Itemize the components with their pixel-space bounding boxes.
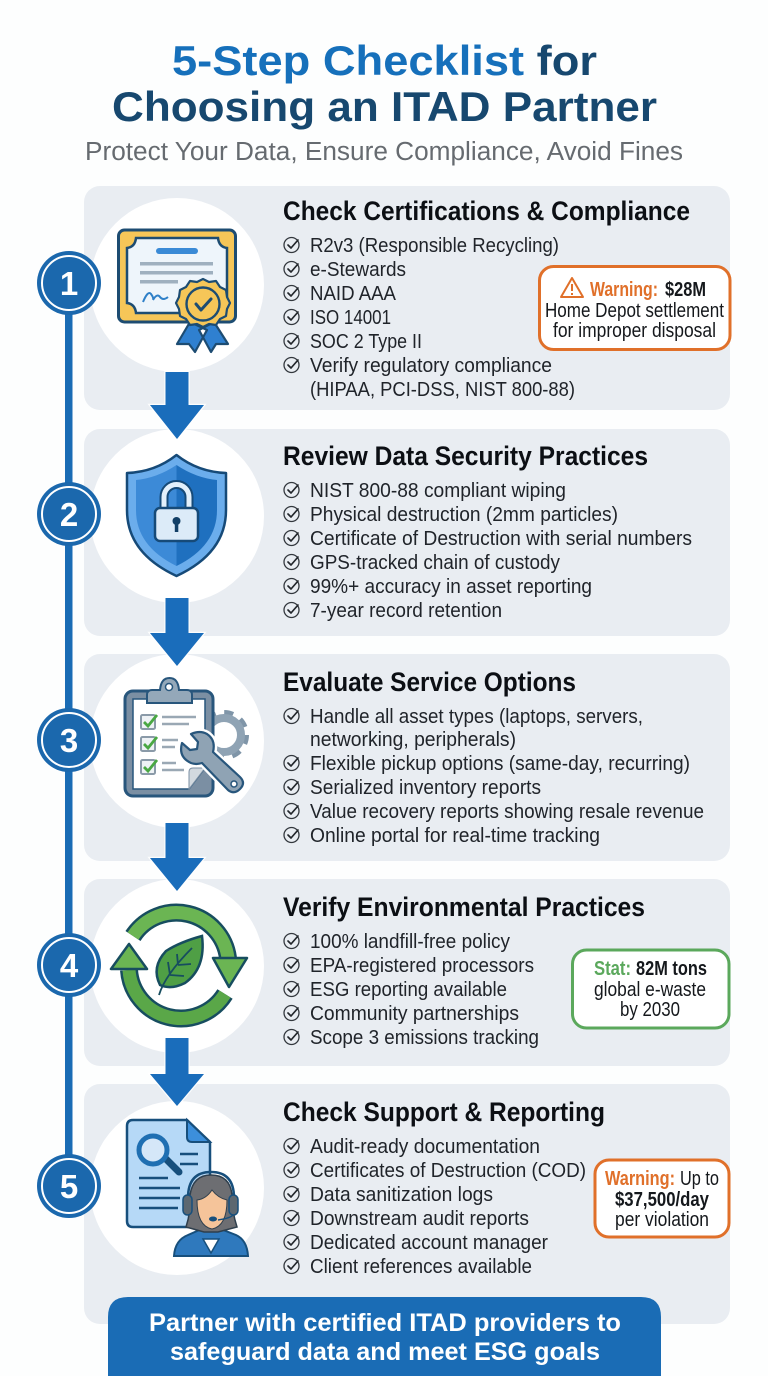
step 5 checklist xyxy=(284,1136,586,1278)
step 4 checklist: Community partnerships xyxy=(310,1003,519,1025)
step 3 heading: Evaluate Service Options xyxy=(283,667,576,697)
step 5 checklist: Client references available xyxy=(310,1256,532,1278)
step 4 heading: Verify Environmental Practices xyxy=(283,892,645,922)
step 3 checklist: Value recovery reports showing resale revenue xyxy=(310,801,704,823)
step 2 checklist: GPS-tracked chain of custody xyxy=(310,552,560,574)
arrow: step 4 to 5 xyxy=(150,1038,204,1106)
callout: e-waste stat: 82M tons xyxy=(636,958,707,980)
step number 5 xyxy=(37,1154,101,1218)
callout: e-waste stat: global e-waste xyxy=(594,979,706,1001)
panel: step 2 background xyxy=(84,429,730,636)
step 2 checklist: Physical destruction (2mm particles) xyxy=(310,504,618,526)
step 5 heading: Check Support & Reporting xyxy=(283,1097,605,1127)
icon: certificate with rosette xyxy=(118,230,236,352)
step 1 checklist xyxy=(284,235,575,401)
icon disc: step 4 xyxy=(90,879,264,1053)
step 2 checklist: NIST 800-88 compliant wiping xyxy=(310,480,566,502)
step number 4 xyxy=(37,933,101,997)
step 4 checklist: ESG reporting available xyxy=(310,979,507,1001)
callout: per-violation warning xyxy=(595,1160,729,1237)
title: 5-Step Checklist for xyxy=(172,37,597,84)
icon: document review with support agent xyxy=(127,1120,248,1256)
callout: Home Depot warning: for improper disposal xyxy=(553,320,716,342)
step 1 checklist: NAID AAA xyxy=(310,283,397,305)
callout: e-waste stat: Stat: xyxy=(594,958,631,980)
call to action banner: Partner with certified ITAD providers to xyxy=(149,1309,621,1337)
step number 4: 4 xyxy=(60,947,79,984)
callout: e-waste stat xyxy=(572,950,729,1028)
step 5 checklist: Downstream audit reports xyxy=(310,1208,529,1230)
step number 5: 5 xyxy=(60,1168,78,1205)
step 2 checklist: Certificate of Destruction with serial numbers xyxy=(310,528,692,550)
title xyxy=(112,37,657,130)
step 1 checklist: (HIPAA, PCI-DSS, NIST 800-88) xyxy=(310,379,575,401)
step 1 checklist: e-Stewards xyxy=(310,259,406,281)
arrow: step 2 to 3 xyxy=(150,598,204,666)
step 4 checklist xyxy=(284,931,539,1049)
panel: step 4 background xyxy=(84,879,730,1066)
panel: step 5 background xyxy=(84,1084,730,1324)
icon: clipboard with gear and wrench xyxy=(125,678,245,796)
step 1 checklist: Verify regulatory compliance xyxy=(310,355,552,377)
icon disc: step 2 xyxy=(90,429,264,603)
step 1 heading: Check Certifications & Compliance xyxy=(283,196,690,226)
step 5 checklist: Data sanitization logs xyxy=(310,1184,493,1206)
step 3 checklist: networking, peripherals) xyxy=(310,729,516,751)
step 4 checklist: EPA-registered processors xyxy=(310,955,534,977)
step 1 checklist: R2v3 (Responsible Recycling) xyxy=(310,235,559,257)
title: Choosing an ITAD Partner xyxy=(112,83,657,130)
icon disc: step 1 xyxy=(90,198,264,372)
arrow: step 1 to 2 xyxy=(150,372,204,439)
step 4 checklist: 100% landfill-free policy xyxy=(310,931,510,953)
timeline line xyxy=(65,283,72,1186)
step 3 checklist xyxy=(284,706,704,847)
callout: per-violation warning: $37,500/day xyxy=(615,1189,710,1211)
panel: step 3 background xyxy=(84,654,730,861)
step number 3 xyxy=(37,708,101,772)
step 2 heading: Review Data Security Practices xyxy=(283,441,648,471)
step number 2: 2 xyxy=(60,496,78,533)
icon disc: step 3 xyxy=(90,654,264,828)
panel: step 1 background xyxy=(84,186,730,410)
step 2 checklist: 99%+ accuracy in asset reporting xyxy=(310,576,592,598)
step 1 checklist: ISO 14001 xyxy=(310,307,391,329)
subtitle: Protect Your Data, Ensure Compliance, Avoid Fines xyxy=(85,138,683,166)
icon: recycling arrows with leaf xyxy=(111,913,247,1018)
icon: security shield with padlock xyxy=(127,455,226,576)
step 3 checklist: Serialized inventory reports xyxy=(310,777,541,799)
step 5 checklist: Dedicated account manager xyxy=(310,1232,548,1254)
callout: Home Depot warning: Home Depot settlement xyxy=(545,300,724,322)
step number 2 xyxy=(37,482,101,546)
step 2 checklist xyxy=(284,480,692,622)
icon disc: step 5 xyxy=(90,1101,264,1275)
step 5 checklist: Certificates of Destruction (COD) xyxy=(310,1160,586,1182)
call to action banner xyxy=(108,1297,661,1376)
callout: e-waste stat: by 2030 xyxy=(620,999,680,1021)
callout: per-violation warning: Warning: xyxy=(605,1168,675,1190)
step 3 checklist: Handle all asset types (laptops, servers, xyxy=(310,706,643,728)
step number 1: 1 xyxy=(60,265,78,302)
callout: Home Depot warning: $28M xyxy=(665,279,706,301)
arrow: step 3 to 4 xyxy=(150,823,204,891)
step 4 checklist: Scope 3 emissions tracking xyxy=(310,1027,539,1049)
callout: per-violation warning: per violation xyxy=(615,1209,709,1231)
step 3 checklist: Flexible pickup options (same-day, recurring) xyxy=(310,753,690,775)
step number 1 xyxy=(37,251,101,315)
call to action banner: safeguard data and meet ESG goals xyxy=(170,1338,600,1366)
step 3 checklist: Online portal for real-time tracking xyxy=(310,825,600,847)
step 5 checklist: Audit-ready documentation xyxy=(310,1136,540,1158)
callout: Home Depot warning: Warning: xyxy=(590,279,658,301)
callout: Home Depot warning xyxy=(540,266,730,350)
step 1 checklist: SOC 2 Type II xyxy=(310,331,422,353)
callout: per-violation warning: Up to xyxy=(680,1168,719,1190)
step 2 checklist: 7-year record retention xyxy=(310,600,502,622)
step number 3: 3 xyxy=(60,722,78,759)
